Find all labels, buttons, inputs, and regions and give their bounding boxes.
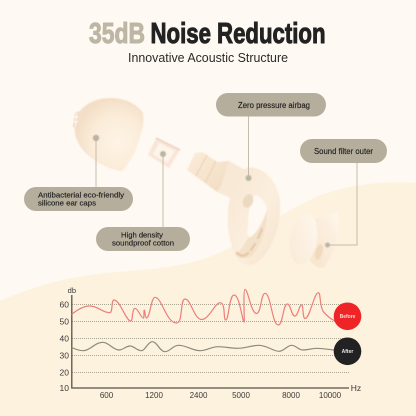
callout: sound filter outer [300,139,387,248]
x axis labels: 600 [100,391,114,400]
icon: soundproof cotton [148,138,180,168]
y axis labels: 30 [60,350,69,360]
x axis labels: Hz [351,383,361,393]
title: 35dB [89,18,145,50]
line chart: noise before and after [60,286,361,400]
legend: before: Before [340,314,356,320]
y axis labels: db [68,286,76,295]
title: Noise Reduction [150,18,326,50]
earplug stem tip [187,152,229,192]
grey line: after [72,342,334,352]
y axis labels: 10 [60,383,69,393]
x axis labels: 10000 [319,391,342,400]
title [89,18,326,50]
chart axes [72,295,349,388]
red line: before [72,289,335,325]
callout: zero pressure airbag: Zero pressure airbag [238,101,310,110]
icon: silicone ear cap [73,98,143,171]
x axis labels: 5000 [232,391,250,400]
y axis labels: 40 [60,334,69,344]
subtitle: Innovative Acoustic Structure [128,50,288,65]
earplug collar [217,161,245,198]
x axis labels [100,383,361,400]
x axis labels: 2400 [190,391,208,400]
x axis labels: 8000 [282,391,300,400]
callout: soundproof cotton [96,151,190,251]
callout: silicone ear caps: silicone ear caps [38,198,96,208]
callout: sound filter outer: Sound filter outer [314,147,373,156]
callout: soundproof cotton: soundproof cotton [112,238,174,248]
y axis labels: 50 [60,316,69,326]
legend: before [334,302,361,330]
y axis labels: 60 [60,300,69,310]
callout: silicone ear caps: Antibacterial eco-friendly [38,190,124,200]
icon: earplug body with zero pressure airbag [187,152,280,265]
callout: zero pressure airbag [216,93,326,181]
y axis labels: 20 [60,368,69,378]
x axis labels: 1200 [145,391,163,400]
icon: sound filter outer [286,211,338,268]
callout: soundproof cotton: High density [121,230,163,240]
callout: silicone ear caps [24,135,133,211]
legend: after: After [342,349,353,355]
y axis labels [60,286,76,393]
legend: after [334,338,361,365]
